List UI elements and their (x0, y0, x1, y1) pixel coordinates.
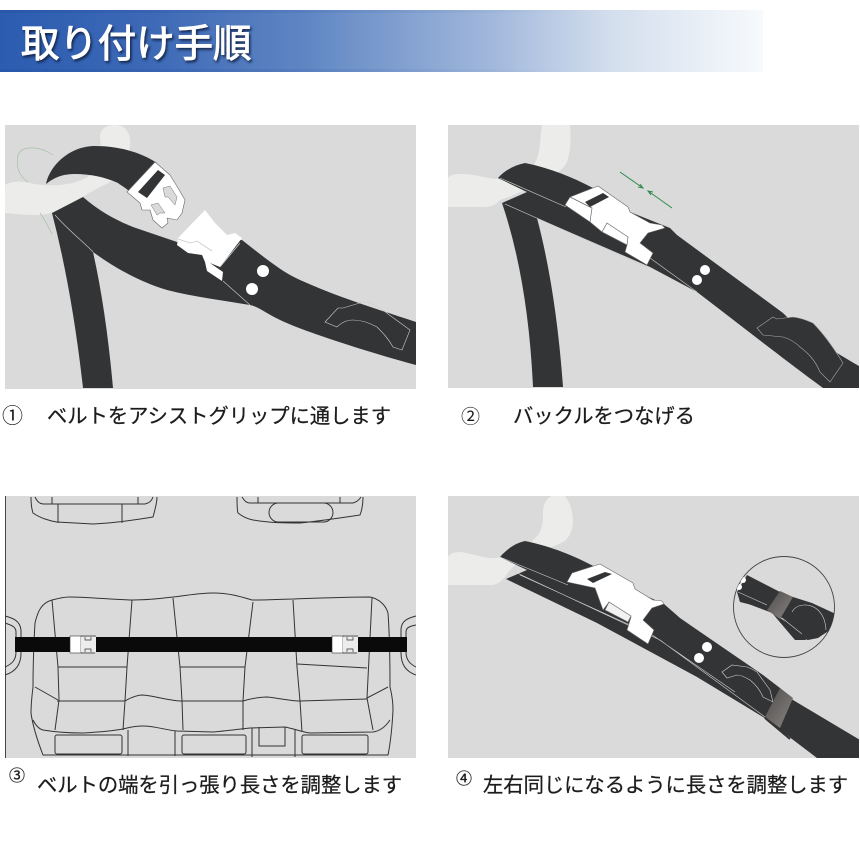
icon: male buckle (127, 162, 185, 228)
icon: green guide line (17, 148, 53, 234)
band (765, 688, 793, 728)
belt (15, 637, 407, 652)
caption: step 3: ③ (9, 767, 25, 785)
icon: assist grip (448, 496, 573, 585)
grip pattern (722, 665, 773, 702)
grip pattern (757, 317, 843, 382)
side handles (5, 616, 416, 675)
lower belt (506, 570, 860, 758)
panel: step 2 connect buckle (448, 125, 859, 388)
long belt (52, 197, 416, 365)
panel: step 1 thread belt through assist grip (5, 125, 416, 389)
holes (257, 265, 269, 277)
rear bench seat (31, 593, 393, 757)
caption: step 4: ④ (456, 770, 472, 788)
icon: green arrows (620, 172, 672, 208)
caption: step 1: ベルトをアシストグリップに通します (47, 405, 391, 428)
panel: step 3 rear seat top view (5, 496, 416, 758)
icon: assist grip (5, 125, 130, 215)
holes (702, 642, 712, 652)
icon: buckle joined (567, 564, 664, 644)
holes (700, 265, 710, 275)
lower belt (502, 192, 859, 388)
inset detail circle (734, 556, 838, 658)
header banner (0, 10, 763, 72)
caption: step 4: 左右同じになるように長さを調整します (483, 774, 848, 797)
icon: left buckle (70, 636, 96, 653)
upper belt (500, 541, 594, 574)
caption: step 2: バックルをつなげる (513, 405, 695, 428)
icon: buckle joined (565, 186, 665, 265)
icon: assist grip (448, 125, 571, 207)
caption: step 3: ベルトの端を引っ張り長さを調整します (37, 774, 402, 797)
upper belt (498, 163, 593, 197)
vertical strap (502, 203, 563, 387)
icon: right buckle (332, 636, 358, 653)
icon: female buckle (177, 210, 242, 281)
caption: step 1: ① (2, 405, 23, 428)
panel: step 4 equalize length (448, 496, 860, 758)
vertical strap (52, 213, 113, 388)
caption: step 2: ② (461, 406, 480, 428)
title: 取り付け手順 (21, 23, 251, 66)
upper belt loop (46, 146, 157, 192)
grip pattern (325, 302, 410, 350)
front left seat (31, 497, 157, 524)
caption: step 3 (9, 767, 402, 797)
front right seat (237, 497, 363, 523)
